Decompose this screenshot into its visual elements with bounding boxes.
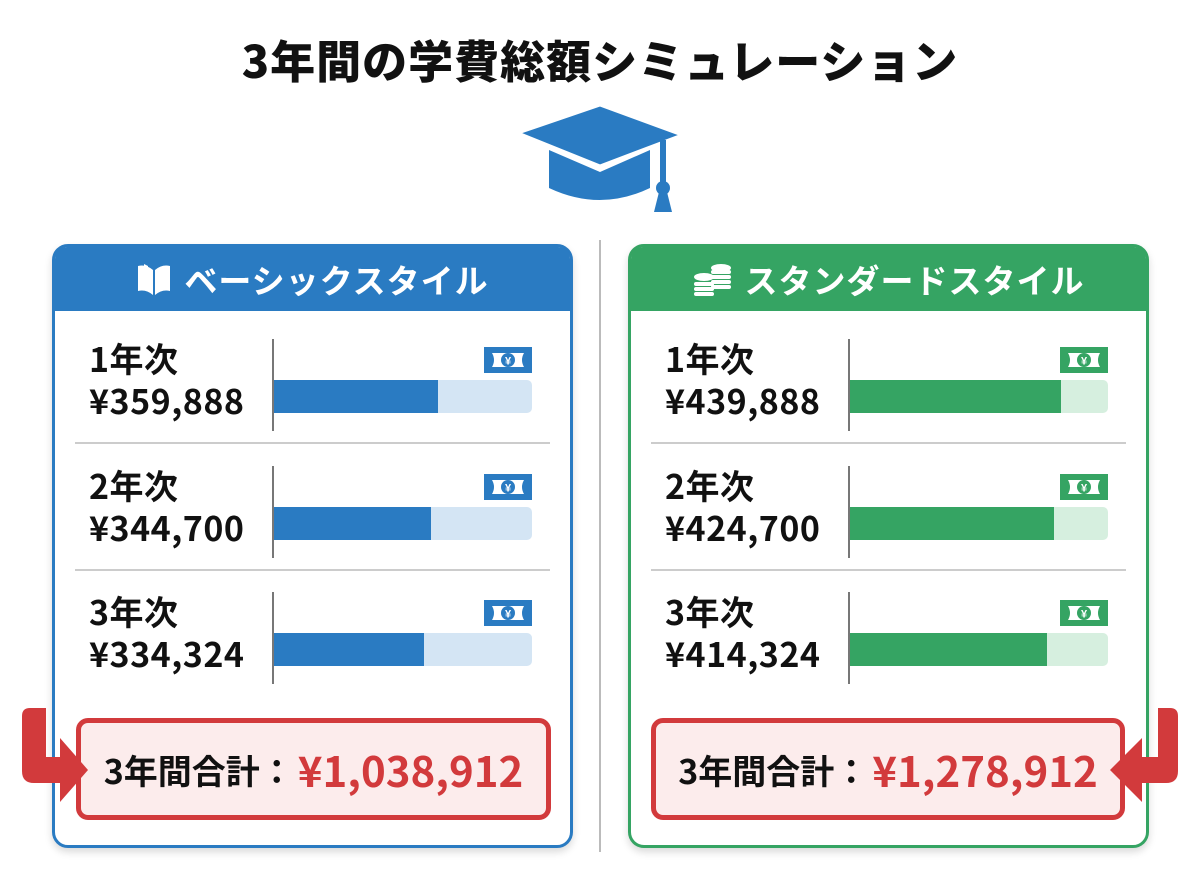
divider (599, 240, 601, 852)
icon: yen bill (484, 347, 532, 373)
row: year 3: 3年次 (89, 586, 179, 635)
heading: standard (631, 247, 1146, 311)
row: year 2: 2年次 (89, 460, 179, 509)
callout: basic total (76, 718, 551, 820)
callout: basic total: 3年間合計： (104, 744, 294, 794)
heading: basic (55, 247, 570, 311)
icon: yen bill: ¥ (505, 482, 512, 494)
callout: standard total: 3年間合計： (678, 744, 868, 794)
arrow: right (1110, 708, 1178, 802)
row: year 1: 1年次 (89, 333, 179, 382)
bar (850, 633, 1108, 666)
bar (850, 507, 1108, 540)
icon: yen bill (1060, 474, 1108, 500)
icon: yen bill: ¥ (505, 356, 512, 368)
icon: yen bill: ¥ (1081, 608, 1088, 620)
icon: yen bill (1060, 347, 1108, 373)
icon: yen bill: ¥ (1081, 482, 1088, 494)
arrow: left (22, 708, 88, 802)
row: year 2: ¥424,700 (665, 502, 820, 551)
row: year 1 (651, 333, 1126, 444)
icon: yen bill (484, 600, 532, 626)
row: year 2 (651, 460, 1126, 571)
row: year 3 (89, 586, 532, 684)
icon: yen bill (1060, 600, 1108, 626)
row: year 3 (665, 586, 1108, 684)
heading: basic: ベーシックスタイル (184, 263, 489, 300)
title: 3年間の学費総額シミュレーション (242, 26, 958, 91)
heading: standard: スタンダードスタイル (744, 263, 1084, 300)
callout: basic total: ¥1,038,912 (298, 738, 523, 800)
row: year 3: 3年次 (665, 586, 755, 635)
bar (850, 380, 1108, 413)
row: year 1: ¥359,888 (89, 375, 244, 424)
bar (274, 507, 532, 540)
icon: yen bill (484, 474, 532, 500)
row: year 3: ¥334,324 (89, 628, 244, 677)
callout: standard total: ¥1,278,912 (872, 738, 1098, 800)
panel: basic style (52, 244, 573, 848)
row: year 1: ¥439,888 (665, 375, 820, 424)
callout: standard total (651, 718, 1125, 820)
row: year 2 (75, 460, 550, 571)
row: year 2: 2年次 (665, 460, 755, 509)
icon: graduation cap (522, 106, 678, 212)
panel: standard style (628, 244, 1149, 848)
bar (274, 633, 532, 666)
row: year 2: ¥344,700 (89, 502, 244, 551)
icon: yen bill: ¥ (1081, 356, 1088, 368)
row: year 3: ¥414,324 (665, 628, 820, 677)
bar (274, 380, 532, 413)
row: year 1: 1年次 (665, 333, 755, 382)
row: year 1 (75, 333, 550, 444)
icon: yen bill: ¥ (505, 608, 512, 620)
